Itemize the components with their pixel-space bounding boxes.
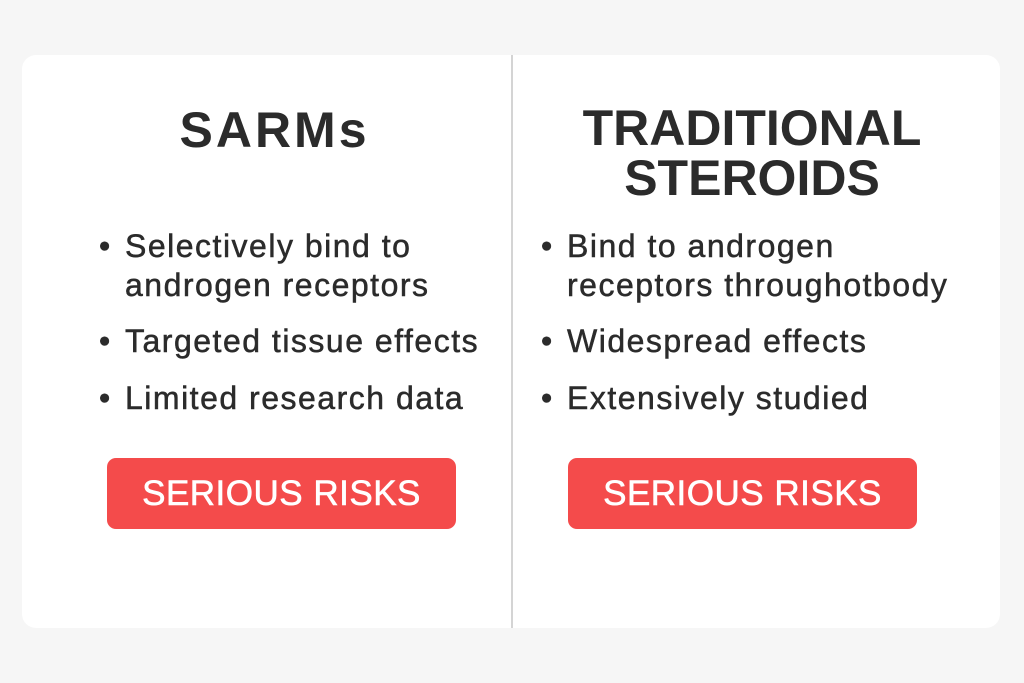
- title: SARMs: SARMs: [179, 102, 370, 158]
- panel: SARMs: •: [99, 228, 110, 264]
- panel: Traditional Steroids: •: [541, 380, 552, 416]
- button: serious risks: SERIOUS RISKS: [142, 474, 421, 513]
- title: Traditional Steroids: TRADITIONAL: [583, 100, 921, 156]
- panel: SARMs: [99, 102, 479, 529]
- button: serious risks: SERIOUS RISKS: [603, 474, 882, 513]
- bullet 3: Limited research data: [125, 380, 464, 416]
- button: serious risks: [568, 458, 917, 529]
- bullet 1: [541, 228, 948, 303]
- panel: SARMs: •: [99, 380, 110, 416]
- bullet 2: Widespread effects: [567, 323, 867, 359]
- title: Traditional Steroids: STEROIDS: [624, 150, 880, 206]
- bullet 1: androgen receptors: [125, 267, 430, 303]
- bullet 3: Extensively studied: [567, 380, 869, 416]
- bullet 1: receptors throughotbody: [567, 267, 948, 303]
- title: Traditional Steroids: [583, 100, 921, 206]
- bullet 1: Bind to androgen: [567, 228, 835, 264]
- panel: Traditional Steroids: •: [541, 228, 552, 264]
- panel: SARMs: •: [99, 323, 110, 359]
- bullet 1: [99, 228, 430, 303]
- panel: Traditional Steroids: •: [541, 323, 552, 359]
- panel: Traditional Steroids: [541, 100, 948, 529]
- button: serious risks: [107, 458, 456, 529]
- bullet 2: Targeted tissue effects: [125, 323, 479, 359]
- bullet 1: Selectively bind to: [125, 228, 411, 264]
